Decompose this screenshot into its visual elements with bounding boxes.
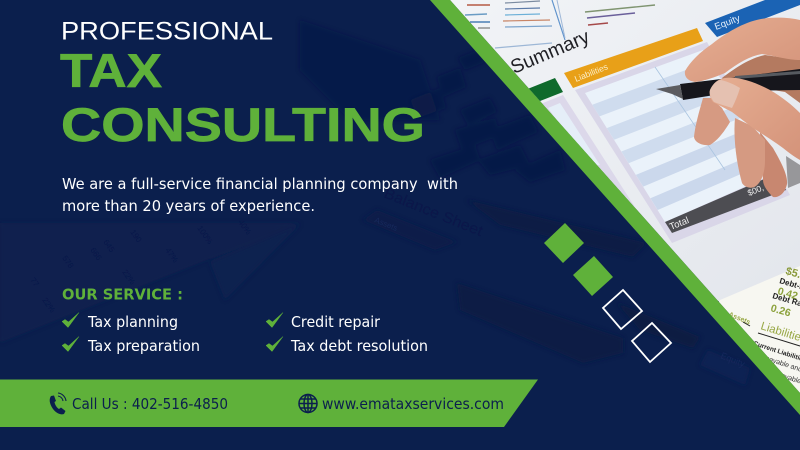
total bar: [665, 180, 786, 233]
lower paper text: Assets: [727, 311, 751, 326]
faded background text: 578: [60, 254, 76, 271]
faded background text: 40%: [236, 218, 253, 236]
pen highlight: [735, 71, 800, 79]
label: Liabilities: Liabilities: [573, 61, 609, 84]
label: Total: Total: [668, 215, 691, 233]
description text: [62, 175, 458, 215]
palm shadow: [722, 55, 800, 103]
icon: globe: [299, 394, 317, 412]
title line: tax: TAX: [60, 44, 162, 97]
middle finger: [694, 98, 730, 145]
top chart strip: [465, 0, 655, 48]
faded background text: 22%: [40, 296, 57, 314]
grey object under hand: [786, 156, 800, 188]
thumbnail: [710, 80, 740, 108]
faded background text: 645: [101, 238, 117, 255]
service: credit repair: Credit repair: [291, 313, 381, 331]
service: tax preparation: Tax preparation: [87, 337, 200, 355]
pen nib: [656, 85, 683, 99]
thumb: [710, 78, 800, 160]
description text: more than 20 years of experience.: [62, 197, 315, 215]
service: tax debt resolution: Tax debt resolution: [290, 337, 428, 355]
label: Equity: Equity: [713, 13, 742, 33]
photo: hand signing balance sheet: [440, 0, 800, 400]
service: tax planning: Tax planning: [87, 313, 178, 331]
services list: [62, 312, 428, 355]
description text: We are a full-service financial planning company with: [62, 175, 458, 193]
blue Equity header: [705, 0, 800, 37]
title line: consulting: CONSULTING: [61, 98, 425, 151]
lower paper text: 0.26: [769, 302, 792, 320]
paper: [440, 0, 800, 302]
label: amount: $00,: [746, 182, 765, 198]
little finger: [760, 132, 787, 197]
title: [60, 18, 425, 151]
lower paper text: 0.42: [776, 285, 799, 303]
ring finger: [734, 118, 765, 188]
faded background text: Balance Sheet: [382, 185, 486, 240]
faded background text: 77: [28, 276, 41, 289]
faded background photo: [0, 20, 750, 385]
faded background text: Equity: [719, 351, 747, 369]
diamond outline 2: [632, 323, 671, 362]
title line: professional: PROFESSIONAL: [61, 18, 273, 46]
faded background text: 100%: [195, 224, 214, 246]
heading: Summary: Summary: [507, 26, 593, 79]
pen barrel: [680, 69, 800, 100]
diamond outline 1: [603, 290, 642, 329]
green diagonal band: [430, 0, 800, 415]
phone number: Call Us : 402-516-4850: [72, 395, 228, 413]
contact bar: [0, 380, 538, 427]
faded background text: 190: [128, 228, 144, 245]
decorative diamonds: [544, 223, 671, 362]
faded background text: 22%: [120, 268, 137, 286]
diamond filled 2: [573, 256, 613, 296]
left panel: [542, 95, 636, 209]
services heading: OUR SERVICE :: [62, 286, 183, 304]
faded background text: 666: [88, 246, 104, 263]
green tab: [529, 78, 563, 101]
orange Liabilities header: [564, 28, 703, 88]
faded background text: Assets: [373, 216, 399, 233]
lavender table panel: [575, 42, 790, 243]
diamond filled 1: [544, 223, 584, 263]
icon: phone: [50, 393, 66, 414]
calculator keys: [410, 50, 565, 182]
hand: [656, 18, 800, 197]
table rows: [585, 50, 778, 222]
lower paper: [718, 266, 800, 393]
faded background text: 47%: [163, 246, 180, 264]
upper finger: [685, 18, 800, 82]
website: www.emataxservices.com: [322, 395, 504, 413]
faded background text: [28, 185, 747, 369]
lower paper text: [727, 265, 800, 386]
